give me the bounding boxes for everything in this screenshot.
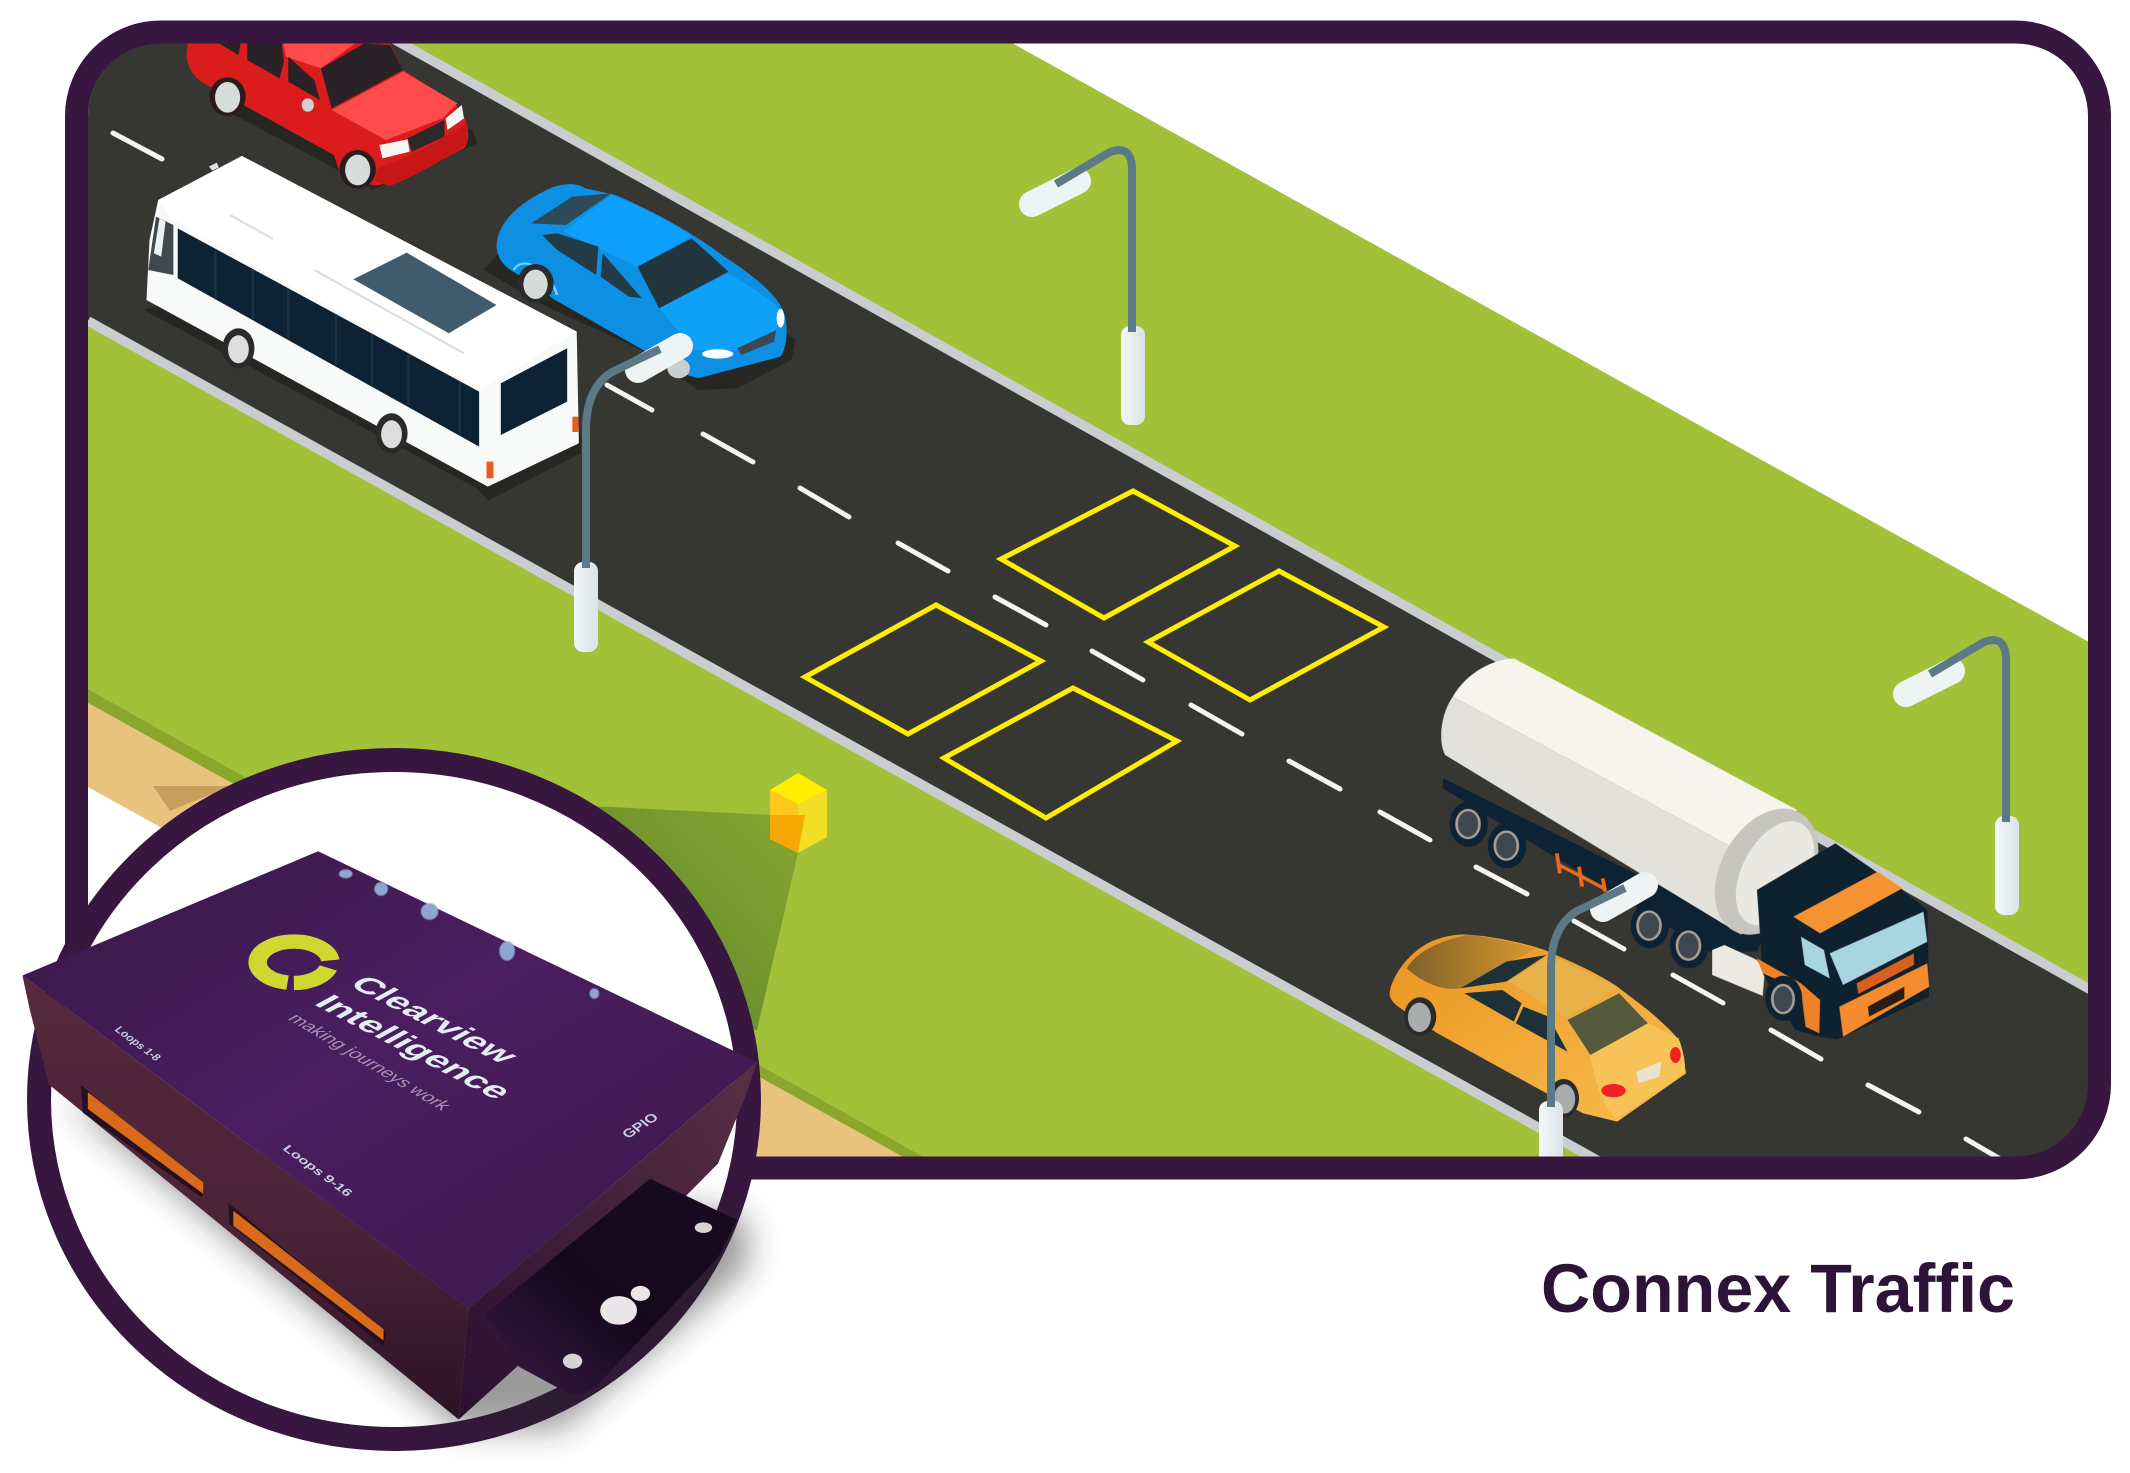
lamp 1 head (638, 346, 680, 370)
truck cab (1757, 843, 1929, 1039)
lamp 3 base (1995, 816, 2019, 915)
logo ring (258, 942, 330, 983)
cube left face (770, 790, 798, 853)
tanker wheel rims (1457, 810, 1700, 960)
road surface (88, 43, 2089, 1157)
blue car wheels (517, 264, 690, 378)
tanker wheels (1450, 801, 1708, 968)
cab wheel rim (1772, 985, 1794, 1013)
device text: Intelligence: Intelligence (307, 990, 521, 1104)
red car hood (332, 72, 457, 140)
bus rear window (501, 348, 567, 435)
orange car tail lights (1601, 1047, 1681, 1097)
cube top (770, 773, 827, 804)
device callout circle (39, 760, 749, 1439)
orange car boot (1590, 1023, 1685, 1118)
red car side windows (219, 43, 320, 100)
device right face (459, 1062, 757, 1420)
red car headlights (379, 105, 464, 158)
device label: GPIO: GPIO (619, 1111, 662, 1141)
red car roof (283, 44, 355, 68)
tanker orange guard (1557, 853, 1606, 892)
bus roof vent (209, 163, 219, 171)
truck fuel tank (1712, 945, 1765, 996)
blue car body (496, 184, 787, 378)
lamp 2 arm (1056, 150, 1132, 332)
cab orange roof strip (1793, 872, 1902, 933)
lamp 4 head (1603, 885, 1645, 909)
street lamp 3 (1906, 640, 2019, 915)
bus solar panel (353, 253, 496, 333)
device label: loops 9-16: Loops 9-16 (280, 1143, 356, 1199)
traffic device (22, 851, 757, 1430)
street lamp 1 (574, 346, 680, 652)
yellow sensor cube (770, 773, 827, 853)
sand shadow (153, 786, 231, 811)
tank upper side (1453, 658, 1797, 853)
connector 2 housing (228, 1203, 386, 1346)
connector 2 pins (233, 1211, 384, 1340)
red car body (186, 33, 468, 186)
red car shadow (234, 106, 477, 190)
lower kerb (88, 321, 1640, 1184)
tanker truck (1441, 658, 1929, 1039)
orange car rear window (1568, 993, 1648, 1055)
blue car roof (564, 195, 692, 267)
title: Connex Traffic: Connex Traffic (1541, 1250, 2015, 1327)
port markings (339, 869, 599, 999)
device shadow (65, 1100, 750, 1430)
lamp 2 head (1032, 181, 1078, 204)
cab bumper (1839, 963, 1929, 1037)
orange car wheels (1404, 997, 1579, 1118)
cab number plate (1868, 987, 1904, 1017)
tank end face (1720, 811, 1830, 935)
orange car (1390, 935, 1686, 1122)
blue car (483, 184, 796, 390)
sensor beam (590, 806, 798, 1030)
orange car plate (1636, 1062, 1661, 1083)
red car bumper (375, 123, 467, 186)
bracket key hole (600, 1286, 650, 1325)
orange car roof (1508, 955, 1617, 1018)
blue car side windows (542, 233, 642, 298)
blue car windscreen (637, 238, 729, 308)
cab windscreen (1830, 912, 1927, 985)
lamp 1 arm (586, 349, 660, 568)
tanker chassis (1443, 778, 1763, 952)
lamp 3 arm (1930, 640, 2006, 822)
bracket screw holes (563, 1222, 712, 1369)
bus roof lines (230, 215, 464, 353)
orange car body (1390, 935, 1686, 1122)
red car mirror (302, 98, 314, 112)
lamp 1 base (574, 562, 598, 652)
sand strip (88, 703, 903, 1157)
lamp 4 base (1539, 1101, 1563, 1191)
device label: loops 1-8: Loops 1-8 (112, 1025, 163, 1063)
lower grass (88, 320, 1640, 1184)
red car wheels (209, 77, 376, 189)
cab grille (1856, 953, 1914, 994)
street lamp 4 (1539, 885, 1645, 1191)
centre line dashes (113, 133, 2002, 1160)
bus side windows (178, 228, 479, 447)
red car grille (408, 120, 444, 152)
connector 1 housing (81, 1085, 204, 1197)
lamp 3 head (1906, 671, 1952, 694)
cab side lower trim (1757, 958, 1820, 1033)
bus body (146, 156, 579, 487)
cab front wheel (1765, 976, 1802, 1021)
bus shadow (144, 306, 581, 500)
bus window dividers (215, 249, 460, 433)
tank end cap (1695, 795, 1838, 948)
bus front windscreen (148, 217, 173, 275)
rounded frame (76, 32, 2100, 1168)
cube right face (798, 790, 827, 853)
lamp 2 base (1121, 326, 1145, 425)
blue car hood (659, 273, 781, 350)
bus (144, 156, 581, 501)
inductive loops (805, 491, 1384, 818)
blue car wheel arch (514, 263, 557, 295)
cab side window (1801, 937, 1830, 978)
red car windscreen (321, 43, 403, 108)
blue car shadow (483, 253, 796, 390)
upper grass (401, 43, 2089, 992)
beam over cube (770, 815, 805, 853)
device top face (22, 851, 757, 1308)
grass lower edge (88, 689, 924, 1157)
street lamp 2 (1032, 150, 1145, 425)
mounting bracket (485, 1179, 737, 1394)
bus roof (158, 156, 577, 332)
bus windscreen highlight (154, 218, 166, 257)
upper kerb (392, 44, 2088, 994)
blue car rear window (531, 193, 611, 225)
tank lower side (1441, 697, 1744, 935)
device text: Clearview: Clearview (342, 972, 526, 1068)
connector 1 pins (88, 1092, 203, 1194)
bus wheels (222, 328, 408, 453)
bus tail lights (487, 417, 578, 478)
road scene (88, 9, 2130, 1191)
orange car windscreen (1460, 955, 1546, 988)
orange car side windows (1464, 990, 1568, 1052)
red car (186, 33, 477, 190)
device text: tagline: making journeys work (284, 1011, 457, 1113)
device left face (22, 975, 468, 1420)
lamp 4 arm (1551, 888, 1625, 1107)
blue car grille (737, 330, 776, 355)
blue car headlights (702, 309, 784, 359)
orange car bonnet (1407, 935, 1537, 989)
